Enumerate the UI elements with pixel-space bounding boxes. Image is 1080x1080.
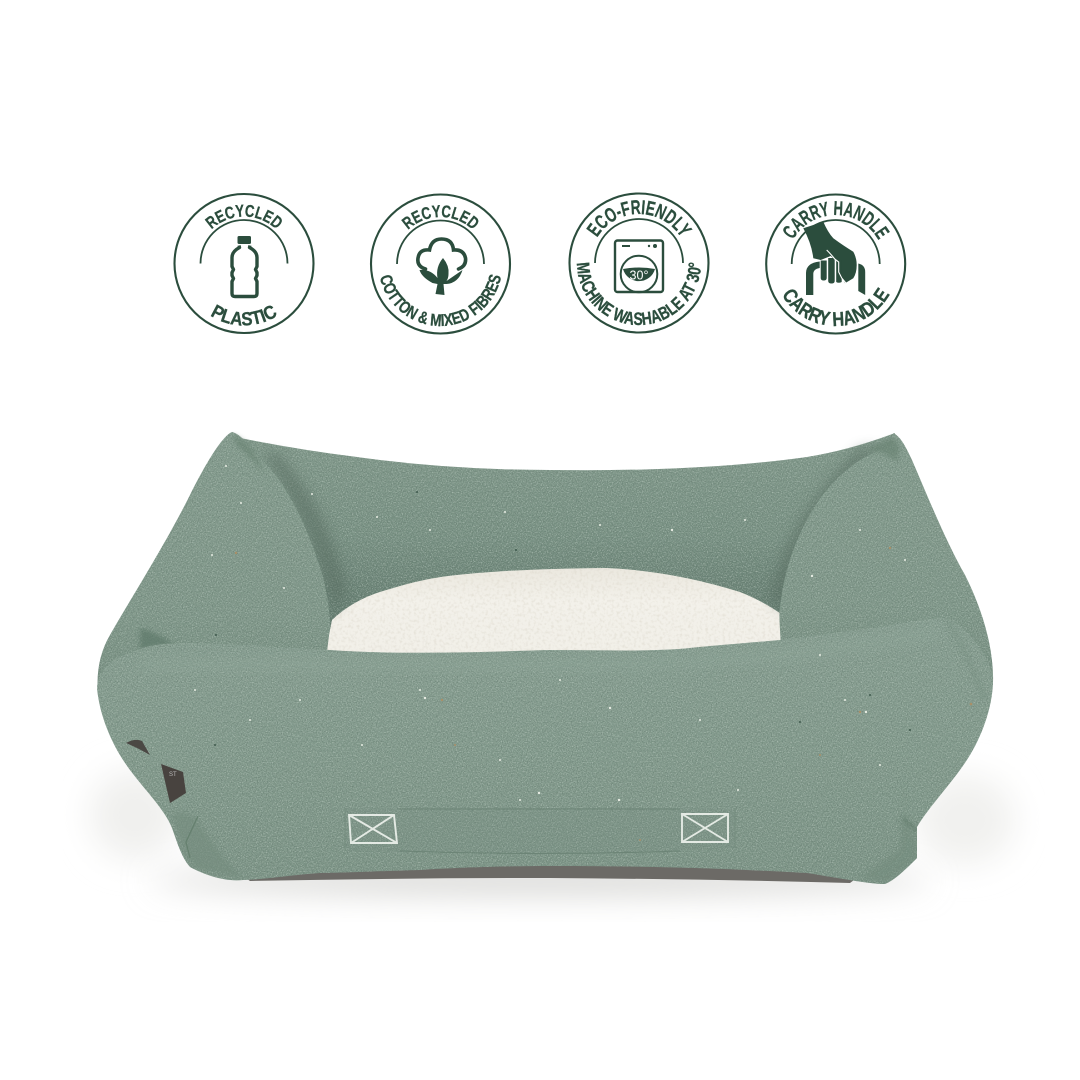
lower left fold xyxy=(172,813,243,878)
stitched cross left xyxy=(349,815,397,843)
bed front bolster xyxy=(97,618,993,884)
shadow cast by wings on back wall xyxy=(262,448,880,612)
bed underside xyxy=(240,860,862,883)
icon: cotton plant xyxy=(418,239,466,295)
bed cushion xyxy=(325,568,785,662)
badge text: machine washable at 30: MACHINE WASHABLE AT 30° xyxy=(576,262,701,326)
badge text: recycled: RECYCLED xyxy=(204,204,282,229)
badge text: carry handle bottom: CARRY HANDLE xyxy=(784,287,890,326)
lower left seam xyxy=(186,816,198,858)
bed label tabs xyxy=(126,740,186,803)
fabric flecks dark xyxy=(214,491,911,746)
bed right wing xyxy=(779,433,993,680)
carry handle strap xyxy=(345,808,737,854)
icon badge: recycled plastic xyxy=(173,193,315,334)
left corner crease xyxy=(140,628,176,650)
badge text: eco-friendly: ECO-FRIENDLY xyxy=(586,200,692,238)
icon badge: eco-friendly machine washable xyxy=(568,192,710,334)
badge text: carry handle top: CARRY HANDLE xyxy=(783,201,890,240)
top corner fold left xyxy=(232,434,264,474)
icon: bottle xyxy=(232,236,257,296)
bed back wall xyxy=(240,433,895,640)
lower right fold xyxy=(864,822,917,882)
lower right crease xyxy=(903,818,918,832)
icon: hand gripping handle xyxy=(803,222,865,296)
icon: washing machine: 30° xyxy=(630,268,648,282)
front shading xyxy=(140,620,985,882)
top corner fold right xyxy=(868,437,900,462)
dog bed xyxy=(97,432,993,884)
bed left wing xyxy=(98,432,330,695)
badge text: plastic: PLASTIC xyxy=(210,304,276,326)
badge text: recycled: RECYCLED xyxy=(401,205,478,230)
icon badge: recycled cotton and mixed fibres xyxy=(370,194,512,334)
icon badge: carry handle xyxy=(765,194,906,334)
fabric speckles xyxy=(194,465,906,801)
badge text: cotton and mixed fibres: COTTON & MIXED FIBRES xyxy=(380,274,501,326)
fabric flecks tan xyxy=(235,547,972,841)
right corner shading xyxy=(948,622,982,695)
stitched cross right xyxy=(682,814,728,842)
front top highlight xyxy=(140,632,940,665)
floor shadow xyxy=(90,770,1015,894)
bed label tabs: ST xyxy=(169,772,177,778)
